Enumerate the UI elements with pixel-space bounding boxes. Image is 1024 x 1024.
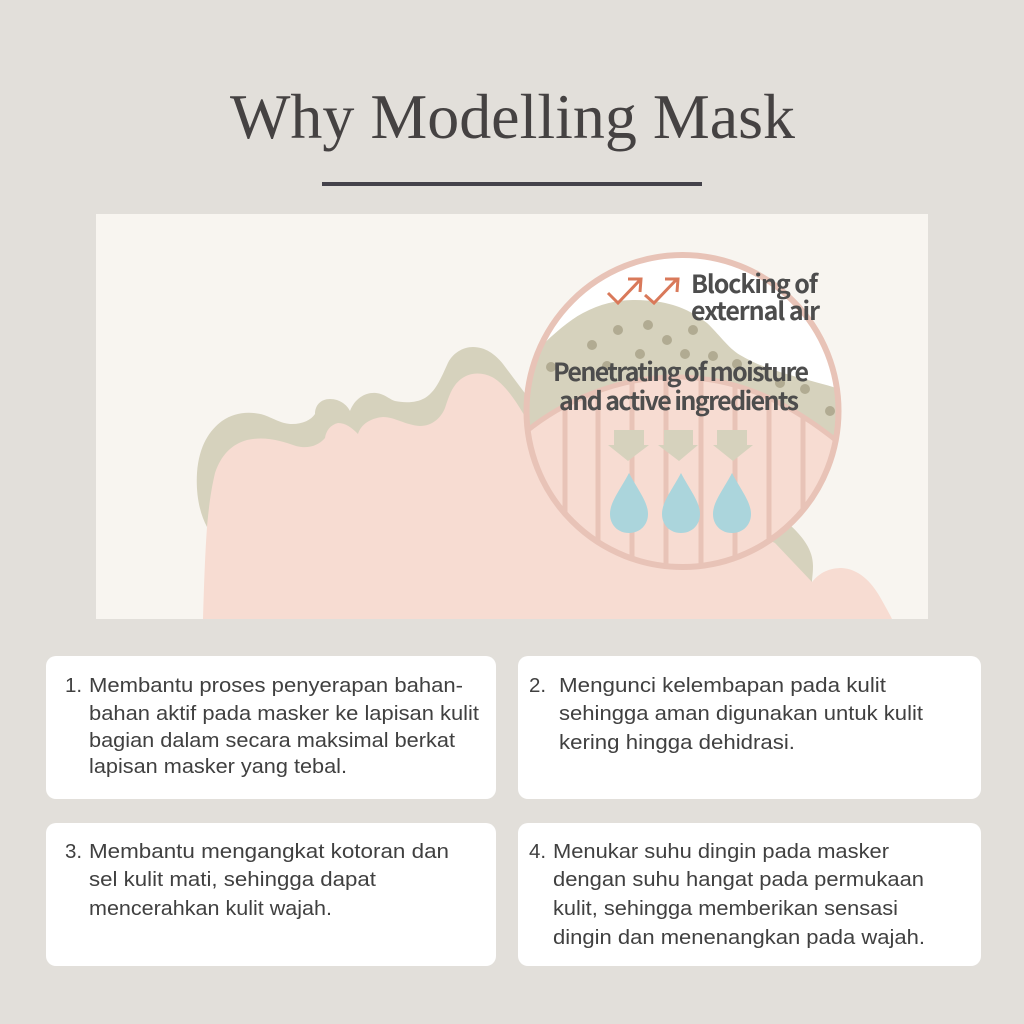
label: blocking of external air: Blocking of <box>691 265 820 301</box>
skin cross-section <box>530 374 834 564</box>
mask layer on face <box>197 347 813 600</box>
panel: card 1: 1. <box>65 674 82 697</box>
panel: card 3: sel kulit mati, sehingga dapat <box>89 868 376 891</box>
panel: illustration <box>96 214 928 619</box>
panel: card 1: Membantu proses penyerapan bahan- <box>89 674 463 697</box>
panel: card 2: 2. <box>529 674 546 697</box>
title: Why Modelling Mask <box>230 81 795 152</box>
label: penetrating of moisture <box>553 353 809 418</box>
panel: card 4: dengan suhu hangat pada permukaan <box>553 868 924 891</box>
panel: card 2: kering hingga dehidrasi. <box>559 731 795 754</box>
panel: card 1: bagian dalam secara maksimal berkat <box>89 729 455 752</box>
label: penetrating of moisture: and active ingredients <box>559 382 799 418</box>
panel: card 3: Membantu mengangkat kotoran dan <box>89 840 449 863</box>
label: penetrating of moisture: Penetrating of moisture <box>553 353 809 389</box>
panel: card 1: bahan aktif pada masker ke lapisan kulit <box>89 702 479 725</box>
panel: card 4: Menukar suhu dingin pada masker <box>553 840 889 863</box>
icon: water drops <box>610 473 751 533</box>
dots: active ingredients <box>546 320 835 416</box>
panel: card 3: 3. <box>65 840 82 863</box>
skin stripes <box>562 380 806 564</box>
title underline <box>322 182 702 186</box>
panel: card 4: dingin dan menenangkan pada wajah. <box>553 926 925 949</box>
panel: card 4: kulit, sehingga memberikan sensasi <box>553 897 898 920</box>
panel: card 1: lapisan masker yang tebal. <box>89 755 347 778</box>
magnified circle <box>515 255 850 580</box>
panel: card 3: mencerahkan kulit wajah. <box>89 897 332 920</box>
mask layer cross-section <box>530 300 836 436</box>
panel: card 3 <box>46 823 496 966</box>
label: blocking of external air: external air <box>691 292 820 328</box>
panel: card 4: 4. <box>529 840 546 863</box>
panel: card 2 <box>518 656 981 799</box>
label: blocking of external air <box>691 265 820 328</box>
panel: card 1 <box>46 656 496 799</box>
icon: deflected arrows <box>608 279 678 303</box>
panel: card 4 <box>518 823 981 966</box>
panel: card 2: Mengunci kelembapan pada kulit <box>559 674 886 697</box>
face skin <box>203 373 892 619</box>
icon: down arrows <box>608 430 753 461</box>
panel: card 2: sehingga aman digunakan untuk kulit <box>559 702 923 725</box>
